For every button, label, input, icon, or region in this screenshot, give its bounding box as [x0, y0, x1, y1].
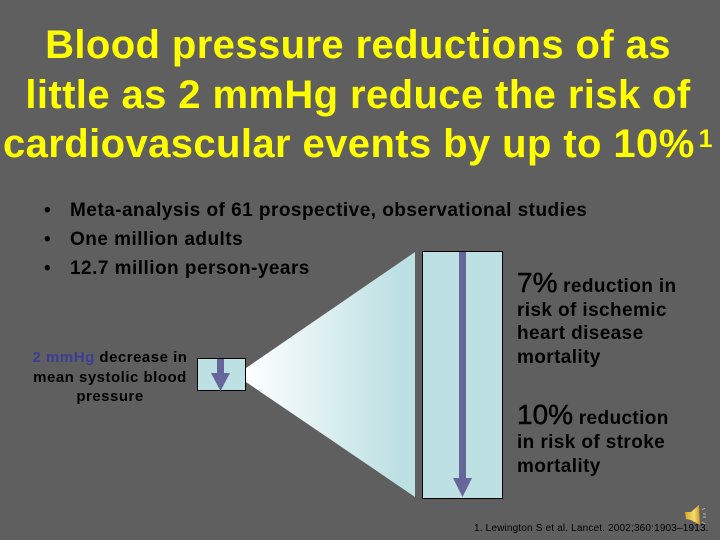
bullet list: Meta-analysis of 61 prospective, observational studies	[70, 200, 587, 221]
title: little as 2 mmHg reduce the risk of	[25, 73, 691, 117]
small box with arrow	[198, 358, 246, 391]
result: 7% reduction: 7% reduction in	[517, 267, 677, 298]
magnifying wedge	[246, 252, 415, 497]
result: 10% reduction: mortality	[517, 456, 601, 477]
citation: 1. Lewington S et al. Lancet. 2002;360:1903–1913.	[474, 523, 709, 534]
result: 7% reduction	[517, 267, 677, 368]
bullet list: One million adults	[70, 229, 243, 250]
icon: speaker	[685, 505, 706, 525]
caption: 2 mmHg decrease: 2 mmHg decrease in	[33, 349, 187, 366]
title	[3, 23, 713, 166]
bullet list: 12.7 million person-years	[70, 258, 310, 279]
result: 10% reduction: 10% reduction	[517, 399, 669, 430]
title: cardiovascular events by up to 10%1	[3, 122, 713, 166]
result: 10% reduction: in risk of stroke	[517, 432, 665, 453]
bullet list: •	[44, 229, 51, 250]
title: Blood pressure reductions of as	[45, 23, 671, 67]
bullet list	[44, 200, 587, 279]
result: 7% reduction: mortality	[517, 347, 601, 368]
result: 7% reduction: heart disease	[517, 323, 644, 344]
large box with arrow	[422, 252, 502, 498]
bullet list: •	[44, 200, 51, 221]
bullet list: •	[44, 258, 51, 279]
result: 7% reduction: risk of ischemic	[517, 300, 667, 321]
caption: 2 mmHg decrease	[33, 349, 187, 405]
result: 10% reduction	[517, 399, 669, 477]
caption: 2 mmHg decrease: pressure	[76, 388, 144, 405]
caption: 2 mmHg decrease: mean systolic blood	[33, 369, 187, 386]
